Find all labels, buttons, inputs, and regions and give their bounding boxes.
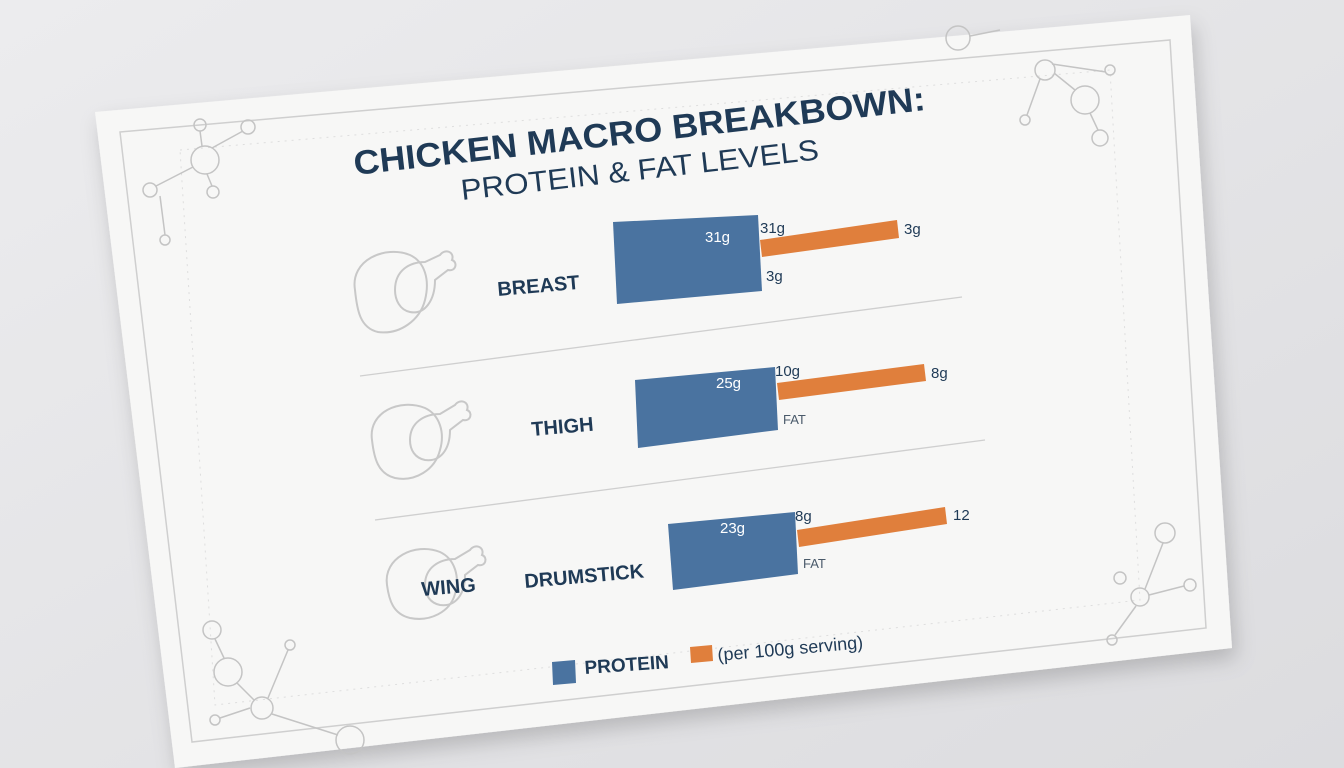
title: CHICKEN MACRO BREAKBOWN: [352,80,927,183]
row: breast: 3g [904,221,921,238]
icon: chicken breast [355,251,455,332]
row: drumstick: 8g [795,508,812,525]
row: drumstick: 23g [720,520,745,537]
row: breast: BREAST [497,272,580,301]
row: thigh: THIGH [531,414,594,441]
row: thigh [372,363,948,479]
row: breast: 3g [766,268,783,285]
row: drumstick: WING [421,574,477,601]
legend: PROTEIN [584,652,670,679]
row: thigh: 10g [775,363,800,380]
row: breast: 31g [705,229,730,246]
row: thigh: FAT [783,412,806,427]
dividers [360,297,985,520]
row: drumstick: DRUMSTICK [524,561,646,593]
row: breast: 31g [760,220,785,237]
row: thigh: 25g [716,375,741,392]
legend [552,632,864,685]
icon: chicken wing [387,546,485,619]
row: breast [355,215,921,332]
title: PROTEIN & FAT LEVELS [459,134,820,207]
row: drumstick: 12 [953,507,970,524]
row: drumstick: FAT [803,556,826,571]
decoration: molecules [143,26,1196,754]
row: drumstick [387,507,970,619]
legend: (per 100g serving) [717,632,864,665]
icon: chicken thigh [372,401,470,479]
row: thigh: 8g [931,365,948,382]
